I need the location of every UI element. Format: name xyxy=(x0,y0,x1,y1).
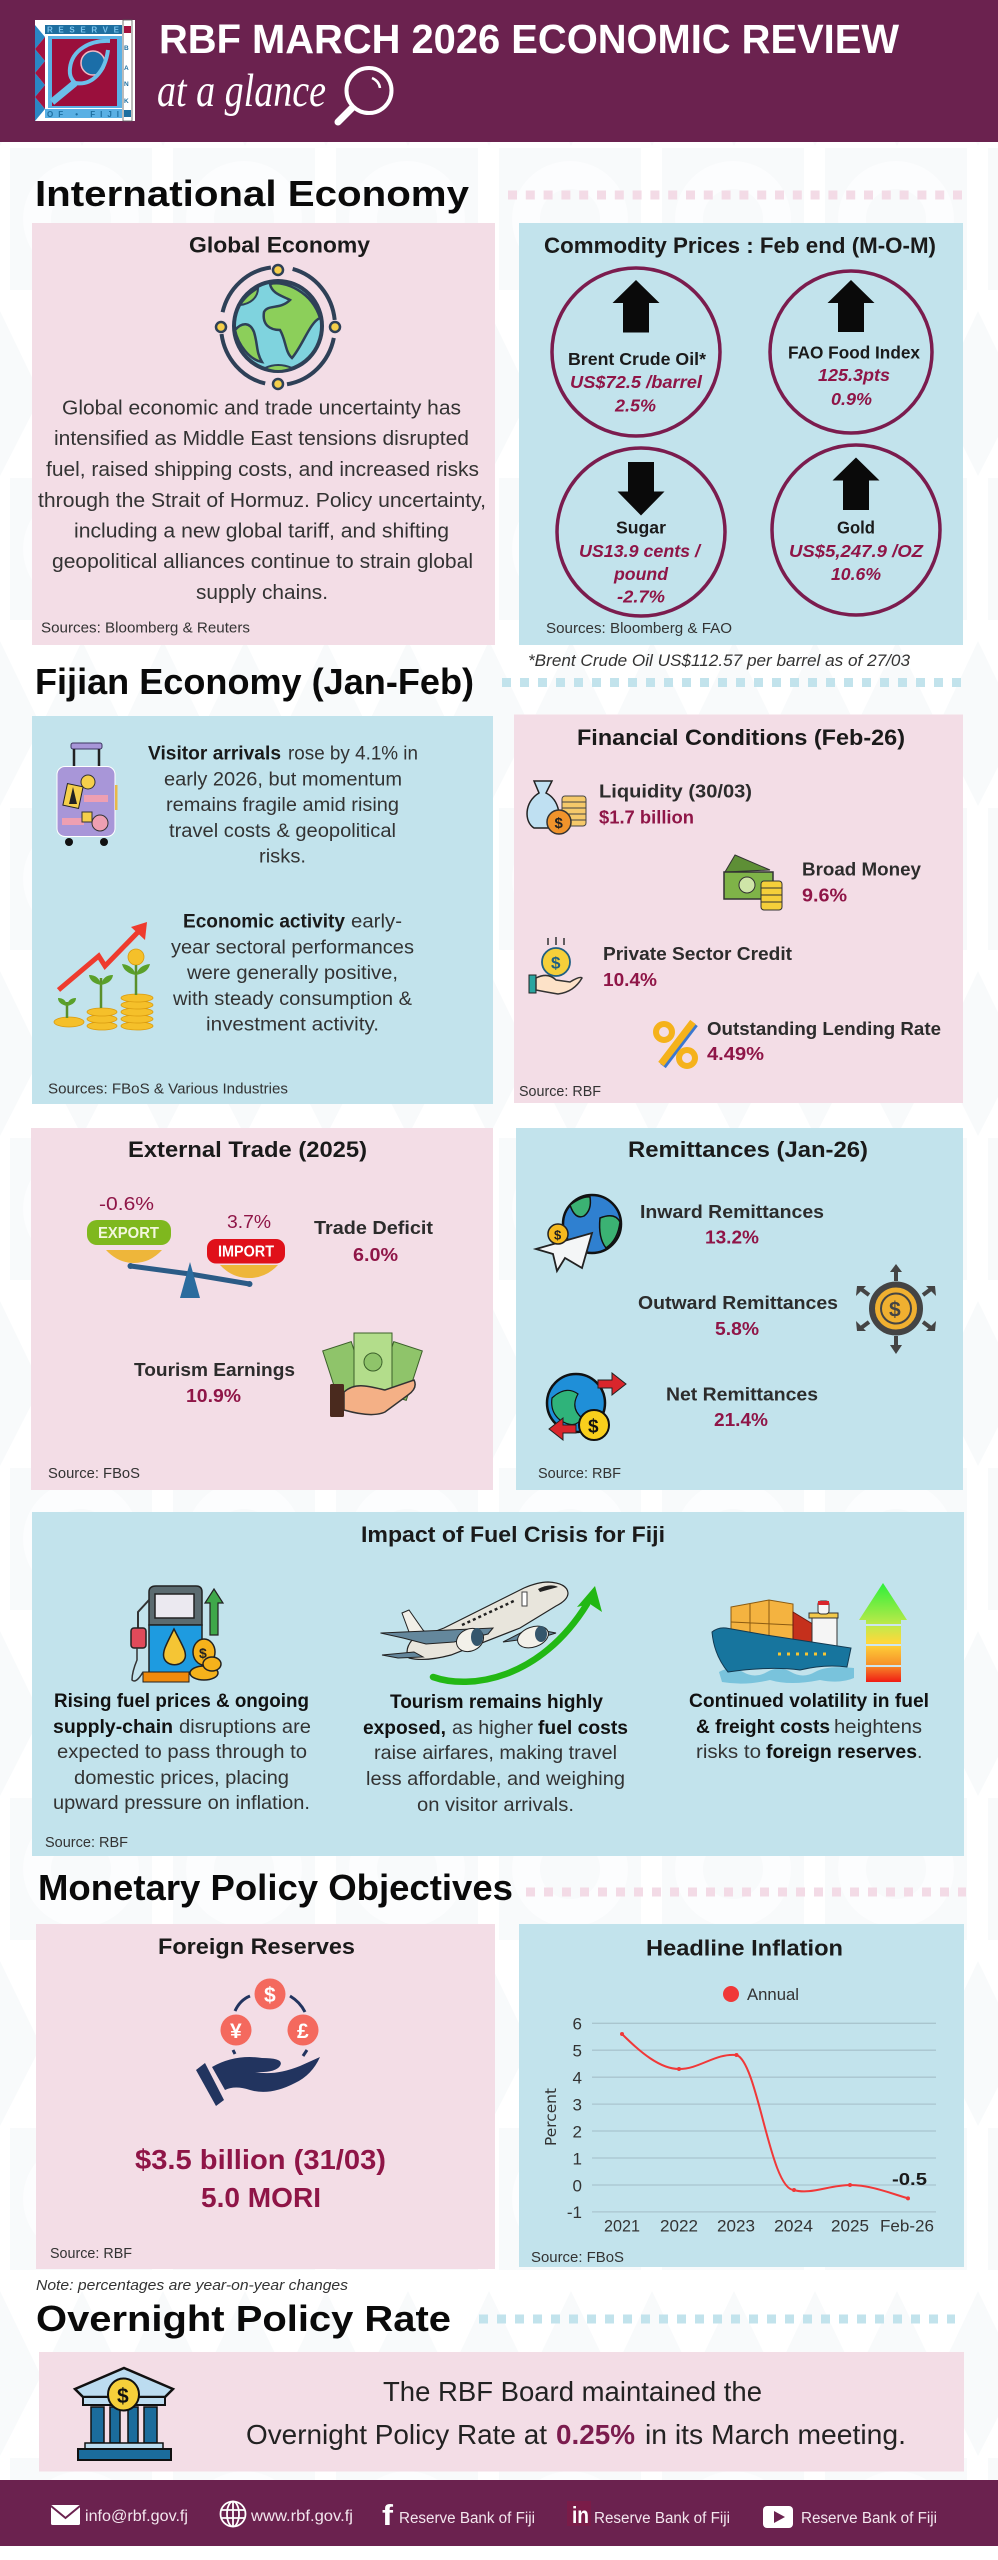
source note: Sources: Bloomberg & FAO xyxy=(546,621,732,637)
text block: tourism exposure: exposed, xyxy=(363,1717,446,1739)
metric: outward remittances: $ xyxy=(889,1298,901,1322)
metric: inward remittances: Inward Remittances xyxy=(640,1201,824,1222)
text block: fuel prices: expected to pass through to xyxy=(57,1741,307,1763)
text block: tourism exposure: Tourism remains highly xyxy=(390,1691,603,1713)
text block: economic activity: investment activity. xyxy=(206,1014,379,1036)
text block: tourism exposure xyxy=(363,1691,628,1816)
metric: trade deficit: Trade Deficit xyxy=(314,1217,433,1238)
commodity: FAO food index: 125.3pts xyxy=(818,365,890,385)
panel: commodity prices xyxy=(519,223,963,645)
text block: economic activity: year sectoral performances xyxy=(171,938,414,958)
metric: outward remittances xyxy=(638,1264,936,1354)
icon: currencies over hand: $ xyxy=(264,1984,276,2007)
metric: liquidity: $ xyxy=(554,815,564,832)
logo: Reserve Bank of Fiji xyxy=(35,20,135,121)
panel heading: Headline Inflation xyxy=(646,1936,843,1960)
text block: tourism exposure: raise airfares, making travel xyxy=(374,1742,617,1764)
panel: external trade xyxy=(31,1128,493,1490)
text block: visitor arrivals: Visitor arrivals xyxy=(148,744,281,764)
text block: global economy summary xyxy=(38,396,486,604)
commodity: sugar: Sugar xyxy=(616,518,666,538)
metric: inward remittances: 13.2% xyxy=(705,1226,759,1248)
icon: currencies over hand xyxy=(196,1978,320,2106)
text block: economic activity xyxy=(171,912,414,1036)
statement: policy rate: The RBF Board maintained the xyxy=(383,2376,762,2407)
heading: Fijian Economy: Fijian Economy (Jan-Feb) xyxy=(35,661,474,702)
metric: broad money: Broad Money xyxy=(802,858,922,880)
logo: Reserve Bank of Fiji: B xyxy=(124,45,129,52)
text block: reserves risk: foreign reserves xyxy=(766,1741,917,1763)
text block: global economy summary: through the Strait of Hormuz. Policy uncertainty, xyxy=(38,489,486,512)
icon: currencies over hand: £ xyxy=(297,2020,309,2043)
line chart: annual inflation: 3 xyxy=(573,2096,582,2114)
icon: growth arrow with coins and plants xyxy=(54,922,153,1030)
icon: bank building xyxy=(75,2368,173,2460)
text block: fuel prices: disruptions are xyxy=(179,1716,311,1738)
text block: tourism exposure: as higher xyxy=(452,1717,534,1739)
footer bar xyxy=(0,2480,998,2546)
contact: facebook xyxy=(382,2500,535,2532)
text block: tourism exposure: less affordable, and weighing xyxy=(366,1768,625,1790)
metric: outstanding lending rate xyxy=(656,1018,941,1066)
panel: foreign reserves xyxy=(36,1924,495,2269)
text block: visitor arrivals: remains fragile amid rising xyxy=(166,795,399,816)
metric: net remittances: $ xyxy=(588,1416,599,1438)
commodity: FAO food index: FAO Food Index xyxy=(788,342,920,362)
metric: liquidity: $1.7 billion xyxy=(599,806,694,828)
icon: bank building: $ xyxy=(117,2385,129,2408)
line chart: annual inflation: 2023 xyxy=(717,2216,755,2236)
text block: visitor arrivals: risks. xyxy=(259,846,306,868)
contact: youtube xyxy=(763,2506,937,2528)
statement: policy rate: 0.25% xyxy=(556,2419,635,2450)
icon: fuel pump xyxy=(131,1586,223,1682)
commodity: sugar xyxy=(557,448,725,616)
label: import: IMPORT xyxy=(218,1244,274,1260)
line chart: annual inflation: 5 xyxy=(573,2042,582,2060)
source note: Sources: FBoS & Various Industries xyxy=(48,1082,288,1098)
commodity: FAO food index: 0.9% xyxy=(831,389,872,409)
contact: linkedin: in xyxy=(572,2502,589,2528)
text block: visitor arrivals: travel costs & geopolitical xyxy=(169,821,396,842)
line chart: annual inflation: 1 xyxy=(573,2150,582,2168)
text block: economic activity: Economic activity xyxy=(183,912,345,932)
text block: global economy summary: Global economic and trade uncertainty has xyxy=(62,396,461,420)
commodity: gold xyxy=(772,445,940,615)
panel heading: Impact of Fuel Crisis for Fiji xyxy=(361,1522,665,1547)
metric: net remittances: Net Remittances xyxy=(666,1384,818,1404)
metric: liquidity xyxy=(527,780,752,834)
text block: fuel prices xyxy=(53,1690,311,1814)
text block: fuel prices: Rising fuel prices & ongoing xyxy=(54,1690,309,1712)
logo: Reserve Bank of Fiji: A xyxy=(124,65,129,72)
text block: reserves risk: risks to xyxy=(696,1741,761,1763)
line chart: annual inflation: 6 xyxy=(573,2014,582,2034)
panel heading: External Trade (2025) xyxy=(128,1137,367,1162)
text block: fuel prices: supply-chain xyxy=(53,1716,173,1738)
line chart: annual inflation: Percent xyxy=(542,2088,560,2146)
illustration: trade balance scale xyxy=(87,1220,285,1298)
commodity: gold: 10.6% xyxy=(831,564,881,584)
value: import change: 3.7% xyxy=(227,1211,271,1232)
commodity: Brent crude oil xyxy=(552,268,720,436)
text block: reserves risk: Continued volatility in fuel xyxy=(689,1690,929,1712)
text block: reserves risk: . xyxy=(917,1741,922,1763)
icon: magnifying glass xyxy=(338,68,392,122)
metric: tourism earnings xyxy=(134,1359,295,1406)
commodity: Brent crude oil: US$72.5 /barrel xyxy=(570,372,703,392)
text block: tourism exposure: fuel costs xyxy=(538,1717,628,1739)
logo: Reserve Bank of Fiji: K xyxy=(124,98,129,105)
icon: hand holding cash xyxy=(323,1333,422,1417)
line chart: annual inflation: 4 xyxy=(573,2068,582,2088)
panel: headline inflation xyxy=(519,1924,964,2267)
metric: outstanding lending rate: 4.49% xyxy=(707,1043,764,1064)
statement: policy rate xyxy=(246,2376,906,2450)
heading: International Economy: International Economy xyxy=(35,173,469,214)
text block: global economy summary: supply chains. xyxy=(196,581,328,604)
panel heading: Global Economy xyxy=(189,232,370,258)
source note: Source: FBoS xyxy=(531,2250,624,2266)
key figures: $3.5 billion (31/03) xyxy=(135,2144,386,2175)
text block: economic activity: with steady consumption & xyxy=(172,989,412,1010)
panel heading: Foreign Reserves xyxy=(158,1934,355,1959)
commodity: gold: US$5,247.9 /OZ xyxy=(789,541,924,561)
panel: overnight policy rate xyxy=(39,2352,964,2472)
metric: outward remittances: 5.8% xyxy=(715,1318,759,1339)
metric: private sector credit xyxy=(529,937,792,994)
chart legend xyxy=(723,1985,799,2004)
icon: suitcase xyxy=(57,743,118,846)
subtitle: at a glance: at a glance xyxy=(157,65,326,117)
note: year-on-year: Note: percentages are year-on-year changes xyxy=(36,2278,348,2294)
metric: broad money xyxy=(724,855,922,910)
metric: private sector credit: Private Sector Credit xyxy=(603,943,792,964)
value: export change: -0.6% xyxy=(99,1193,154,1214)
text block: economic activity: were generally positive, xyxy=(186,963,398,984)
statement: policy rate: Overnight Policy Rate at xyxy=(246,2419,547,2450)
logo: Reserve Bank of Fiji: RESERVE xyxy=(47,26,120,34)
metric: trade deficit xyxy=(314,1217,433,1265)
text block: reserves risk: & freight costs xyxy=(696,1716,830,1738)
commodity: sugar: US13.9 cents / xyxy=(579,541,702,561)
panel: visitor arrivals and economic activity xyxy=(32,716,493,1104)
chart legend: Annual xyxy=(747,1985,799,2004)
commodity: gold: Gold xyxy=(837,518,875,538)
contact: facebook: f xyxy=(382,2500,393,2532)
text block: visitor arrivals: rose by 4.1% in xyxy=(288,744,418,764)
heading: Monetary Policy Objectives: Monetary Policy Objectives xyxy=(38,1867,513,1908)
heading: Overnight Policy Rate: Overnight Policy Rate xyxy=(36,2298,451,2339)
icon: currencies over hand: ¥ xyxy=(230,2020,242,2043)
commodity: FAO food index xyxy=(770,271,932,433)
text block: visitor arrivals: early 2026, but momentum xyxy=(164,770,402,790)
icon: fuel pump: $ xyxy=(199,1645,207,1661)
line chart: annual inflation: 2021 xyxy=(604,2216,640,2236)
source note: Source: RBF xyxy=(538,1466,621,1482)
panel: remittances xyxy=(516,1128,963,1490)
metric: trade deficit: 6.0% xyxy=(353,1244,398,1265)
commodity: sugar: -2.7% xyxy=(617,586,665,606)
line chart: annual inflation xyxy=(542,2014,936,2236)
commodity: Brent crude oil: 2.5% xyxy=(614,396,656,416)
panel heading: Remittances (Jan-26) xyxy=(628,1137,868,1162)
key figures xyxy=(135,2144,386,2213)
text block: global economy summary: including a new global tariff, and shifting xyxy=(74,520,449,542)
panel: impact of fuel crisis xyxy=(32,1512,964,1856)
source note: Source: FBoS xyxy=(48,1466,140,1482)
logo: Reserve Bank of Fiji: OF • FIJI xyxy=(47,110,119,119)
text block: visitor arrivals xyxy=(148,744,418,868)
panel: financial conditions xyxy=(514,714,963,1103)
line chart: annual inflation: 2025 xyxy=(831,2216,869,2236)
metric: outward remittances: Outward Remittances xyxy=(638,1292,838,1313)
line chart: annual inflation: 2 xyxy=(573,2122,582,2142)
text block: global economy summary: fuel, raised shipping costs, and increased risks xyxy=(46,458,479,481)
label: export: EXPORT xyxy=(98,1225,160,1242)
contact: facebook: Reserve Bank of Fiji xyxy=(399,2510,535,2527)
key figures: 5.0 MORI xyxy=(201,2182,321,2213)
metric: private sector credit: 10.4% xyxy=(603,969,657,990)
contact: linkedin xyxy=(567,2501,730,2528)
metric: broad money: 9.6% xyxy=(802,884,847,906)
line chart: annual inflation: 0 xyxy=(573,2176,582,2196)
contact: website: www.rbf.gov.fj xyxy=(250,2508,353,2525)
metric: net remittances: 21.4% xyxy=(714,1409,768,1430)
footnote: Brent crude oil: *Brent Crude Oil US$112.57 per barrel as of 27/03 xyxy=(528,652,911,670)
metric: tourism earnings: 10.9% xyxy=(186,1385,241,1406)
contact: linkedin: Reserve Bank of Fiji xyxy=(594,2510,730,2527)
panel: global economy xyxy=(32,223,495,645)
text block: tourism exposure: on visitor arrivals. xyxy=(417,1794,574,1816)
metric: outstanding lending rate: Outstanding Lending Rate xyxy=(707,1018,941,1039)
metric: inward remittances: $ xyxy=(554,1228,562,1242)
contact: website xyxy=(220,2502,353,2526)
icon: cargo ship with rising arrow xyxy=(712,1583,907,1684)
line chart: annual inflation: 2024 xyxy=(774,2216,813,2236)
metric: inward remittances xyxy=(536,1195,824,1271)
commodity: Brent crude oil: Brent Crude Oil* xyxy=(568,349,706,369)
text block: global economy summary: geopolitical alliances continue to strain global xyxy=(52,550,473,573)
line chart: annual inflation: 2022 xyxy=(660,2216,698,2236)
metric: liquidity: Liquidity (30/03) xyxy=(599,780,752,802)
metric: net remittances xyxy=(547,1373,818,1440)
text block: global economy summary: intensified as Middle East tensions disrupted xyxy=(54,427,469,450)
icon: airplane with rising arrow xyxy=(380,1582,602,1682)
panel heading: Financial Conditions (Feb-26) xyxy=(577,725,905,750)
contact: youtube: Reserve Bank of Fiji xyxy=(801,2510,937,2527)
text block: fuel prices: domestic prices, placing xyxy=(74,1767,289,1789)
line chart: annual inflation: -0.5 xyxy=(892,2169,927,2189)
contact: email xyxy=(51,2505,188,2525)
header banner xyxy=(0,0,998,142)
commodity: sugar: pound xyxy=(613,564,668,584)
line chart: annual inflation: Feb-26 xyxy=(880,2216,934,2236)
logo: Reserve Bank of Fiji: N xyxy=(124,81,129,88)
line chart: annual inflation: -1 xyxy=(567,2203,582,2222)
title: RBF MARCH 2026 ECONOMIC REVIEW xyxy=(159,16,899,62)
source note: Sources: Bloomberg & Reuters xyxy=(41,620,250,636)
metric: private sector credit: $ xyxy=(551,954,561,972)
contact: email: info@rbf.gov.fj xyxy=(85,2508,188,2525)
icon: globe xyxy=(216,265,340,389)
metric: tourism earnings: Tourism Earnings xyxy=(134,1359,295,1380)
statement: policy rate: in its March meeting. xyxy=(645,2419,906,2450)
text block: reserves risk: heightens xyxy=(834,1716,922,1738)
panel heading: Commodity Prices : Feb end (M-O-M) xyxy=(544,233,936,258)
text block: economic activity: early- xyxy=(351,912,402,932)
source note: Source: RBF xyxy=(519,1084,601,1100)
text block: reserves risk xyxy=(689,1690,929,1763)
source note: Source: RBF xyxy=(50,2246,132,2262)
text block: fuel prices: upward pressure on inflation. xyxy=(53,1792,310,1814)
source note: Source: RBF xyxy=(45,1835,128,1851)
